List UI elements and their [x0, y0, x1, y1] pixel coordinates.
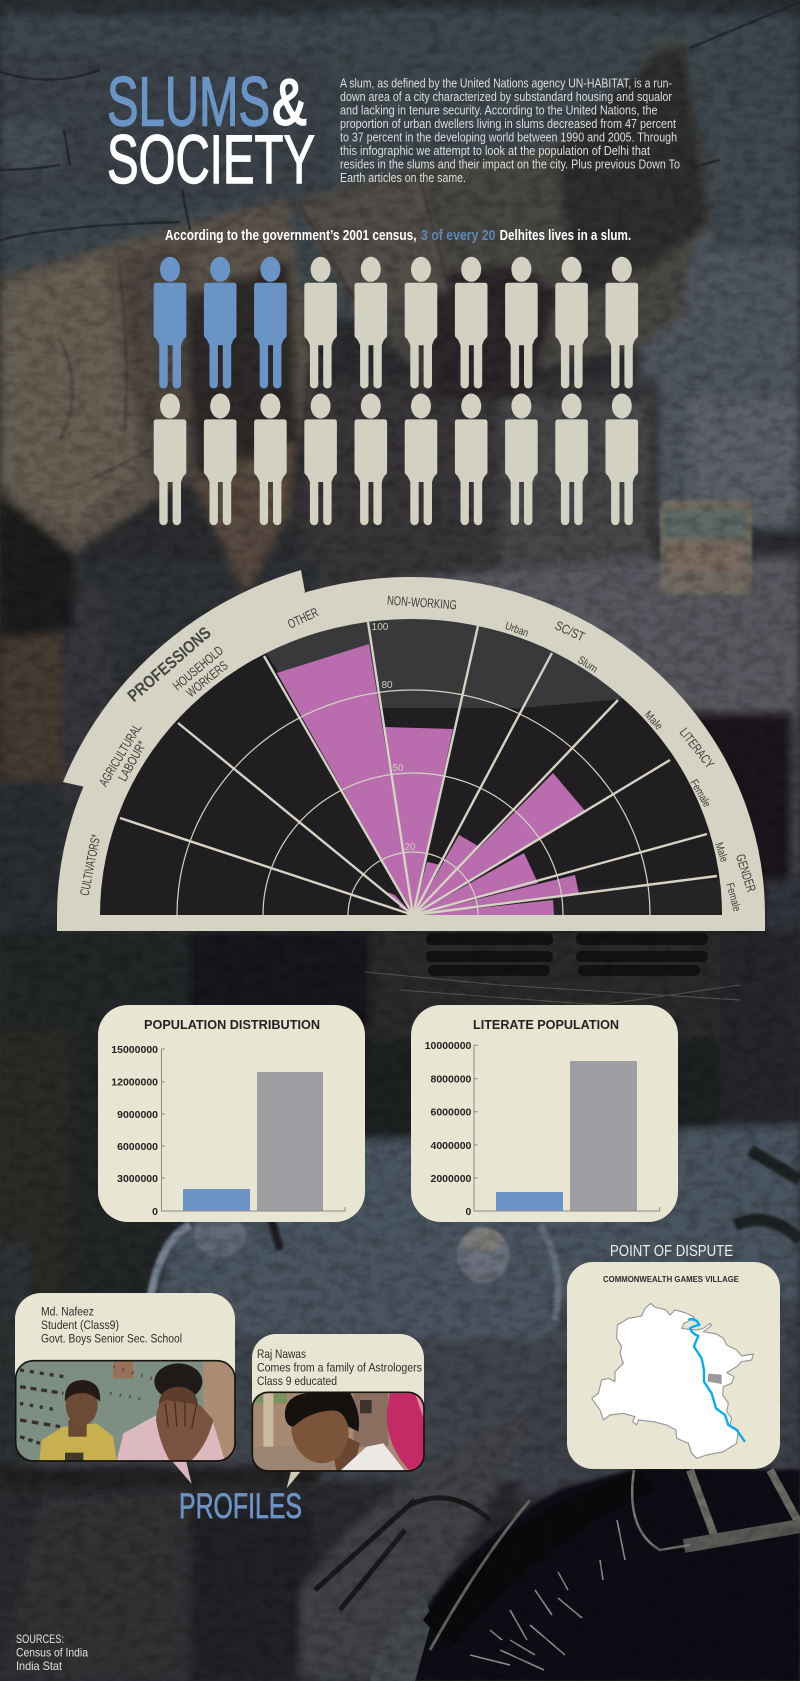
census heading: 3 of every 20 — [421, 228, 496, 244]
panel: literate population — [411, 1005, 678, 1222]
drum lids — [150, 1150, 800, 1320]
vents — [426, 933, 708, 976]
photo: young man — [252, 1392, 424, 1488]
axes — [474, 1045, 660, 1211]
ring labels: LABOUR* — [115, 738, 149, 784]
speech bubble — [252, 1334, 424, 1434]
profile text: Md. Nafeez — [41, 1304, 94, 1318]
pink data wedges — [277, 644, 586, 915]
chart plot background — [100, 619, 722, 915]
sources: India Stat — [16, 1659, 63, 1673]
river Yamuna — [689, 1319, 744, 1441]
census heading: According to the government’s 2001 census, — [165, 228, 416, 244]
axis labels: 8000000 — [431, 1074, 472, 1086]
bars — [183, 1072, 323, 1211]
box — [400, 712, 792, 972]
axis labels: 0 — [152, 1206, 158, 1218]
photo: two boys — [16, 1361, 235, 1484]
sources: SOURCES: — [16, 1632, 64, 1646]
left strip — [0, 540, 62, 790]
title: SOCIETY — [107, 121, 315, 198]
ring labels: Male — [642, 709, 665, 732]
heading: LITERATE POPULATION — [473, 1017, 619, 1032]
scale labels: 80 — [381, 680, 393, 691]
census heading — [165, 228, 631, 244]
games village — [708, 1374, 722, 1384]
ring labels: GENDER — [733, 852, 759, 894]
title: SLUMS — [107, 62, 270, 140]
axis labels — [425, 1040, 472, 1218]
ring labels: AGRICULTURAL — [96, 721, 144, 789]
ring labels: Slum — [575, 654, 600, 676]
pictogram row 1: 3 blue of 10 — [154, 257, 638, 388]
drums — [150, 1125, 800, 1340]
ring labels: Urban — [503, 620, 530, 640]
panel: population distribution — [98, 1005, 365, 1222]
axis labels: 6000000 — [117, 1141, 158, 1153]
scale labels: 20 — [404, 842, 416, 853]
hub — [407, 909, 419, 921]
ring labels: CULTIVATORS* — [77, 833, 103, 897]
below ring — [0, 930, 800, 1150]
intro text block: to 37 percent in the developing world between 1990 and 2005. Through — [340, 130, 677, 144]
axis labels: 15000000 — [111, 1044, 158, 1056]
axes — [162, 1049, 345, 1211]
heading: POPULATION DISTRIBUTION — [144, 1017, 320, 1032]
ring labels — [77, 593, 759, 913]
ring labels: Female — [687, 778, 713, 809]
intro text block: proportion of urban dwellers living in slums decreased from 47 percent — [340, 117, 676, 131]
title: & — [271, 64, 308, 140]
scale labels: 50 — [392, 763, 404, 774]
ring labels: WORKERS — [183, 658, 231, 700]
jacket — [0, 198, 311, 593]
axis labels: 6000000 — [431, 1106, 472, 1118]
profile text: Student (Class9) — [41, 1318, 119, 1332]
profile: Md. Nafeez — [15, 1293, 235, 1484]
semicircular chart — [57, 570, 765, 931]
paint can — [660, 500, 752, 595]
ring labels: Male — [712, 841, 730, 864]
wires — [365, 972, 740, 1005]
blanket — [290, 555, 800, 720]
map heading: COMMONWEALTH GAMES VILLAGE — [603, 1274, 739, 1284]
outer ring — [57, 577, 765, 931]
map of Delhi — [592, 1303, 753, 1458]
intro text block: down area of a city characterized by substandard housing and squalor — [340, 90, 672, 104]
intro text block — [340, 76, 680, 185]
sources — [16, 1632, 88, 1673]
ring labels: Female — [723, 882, 743, 913]
garment folds — [60, 90, 690, 480]
axis labels: 4000000 — [431, 1140, 472, 1152]
point of dispute heading: POINT OF DISPUTE — [610, 1243, 733, 1260]
intro text block: this infographic we attempt to look at the population of Delhi that — [340, 144, 650, 158]
axis labels: 2000000 — [431, 1173, 472, 1185]
panel: map card — [567, 1262, 780, 1469]
ring labels: OTHER — [285, 604, 321, 632]
profile text: Govt. Boys Senior Sec. School — [41, 1332, 182, 1346]
shadow of mirror — [315, 1498, 490, 1610]
title — [107, 62, 315, 198]
axis labels — [111, 1044, 158, 1218]
scale labels — [372, 622, 416, 853]
pictogram row 2 — [154, 394, 638, 525]
ring labels: LITERACY — [677, 725, 718, 771]
axis labels: 3000000 — [117, 1173, 158, 1185]
professions band — [63, 570, 305, 787]
profile text: Comes from a family of Astrologers — [257, 1360, 422, 1374]
profile: Raj Nawas — [252, 1334, 424, 1488]
sources: Census of India — [16, 1646, 88, 1660]
ring labels: HOUSEHOLD — [170, 643, 226, 693]
axis labels: 12000000 — [111, 1076, 158, 1088]
rocks mid — [300, 380, 660, 600]
profile text: Class 9 educated — [257, 1374, 337, 1388]
ring labels: NON-WORKING — [387, 593, 457, 612]
shirt — [291, 40, 714, 387]
wall cracks — [0, 2, 800, 240]
profiles heading: PROFILES — [179, 1487, 302, 1526]
scale labels: 100 — [372, 622, 389, 633]
wheel and fender — [415, 1468, 800, 1681]
profile text — [41, 1304, 182, 1346]
speech bubble — [15, 1293, 235, 1423]
bottom — [0, 1470, 800, 1681]
census heading: Delhites lives in a slum. — [500, 228, 631, 244]
bars — [496, 1061, 637, 1211]
intro text block: Earth articles on the same. — [340, 171, 466, 185]
intro text block: and lacking in tenure security. According to the United Nations, the — [340, 104, 658, 118]
intro text block: resides in the slums and their impact on the city. Plus previous Down To — [340, 157, 680, 171]
wall — [0, 0, 800, 320]
axis labels: 0 — [466, 1206, 472, 1218]
ring labels: PROFESSIONS — [124, 623, 215, 706]
intro text block: A slum, as defined by the United Nations agency UN-HABITAT, is a run- — [340, 76, 672, 90]
profile text: Raj Nawas — [257, 1347, 306, 1361]
grid arcs — [177, 690, 650, 915]
profile text — [257, 1347, 422, 1388]
ring labels: SC/ST — [553, 618, 587, 644]
axis labels: 9000000 — [117, 1109, 158, 1121]
axis labels: 10000000 — [425, 1040, 472, 1052]
spokes — [120, 622, 717, 915]
